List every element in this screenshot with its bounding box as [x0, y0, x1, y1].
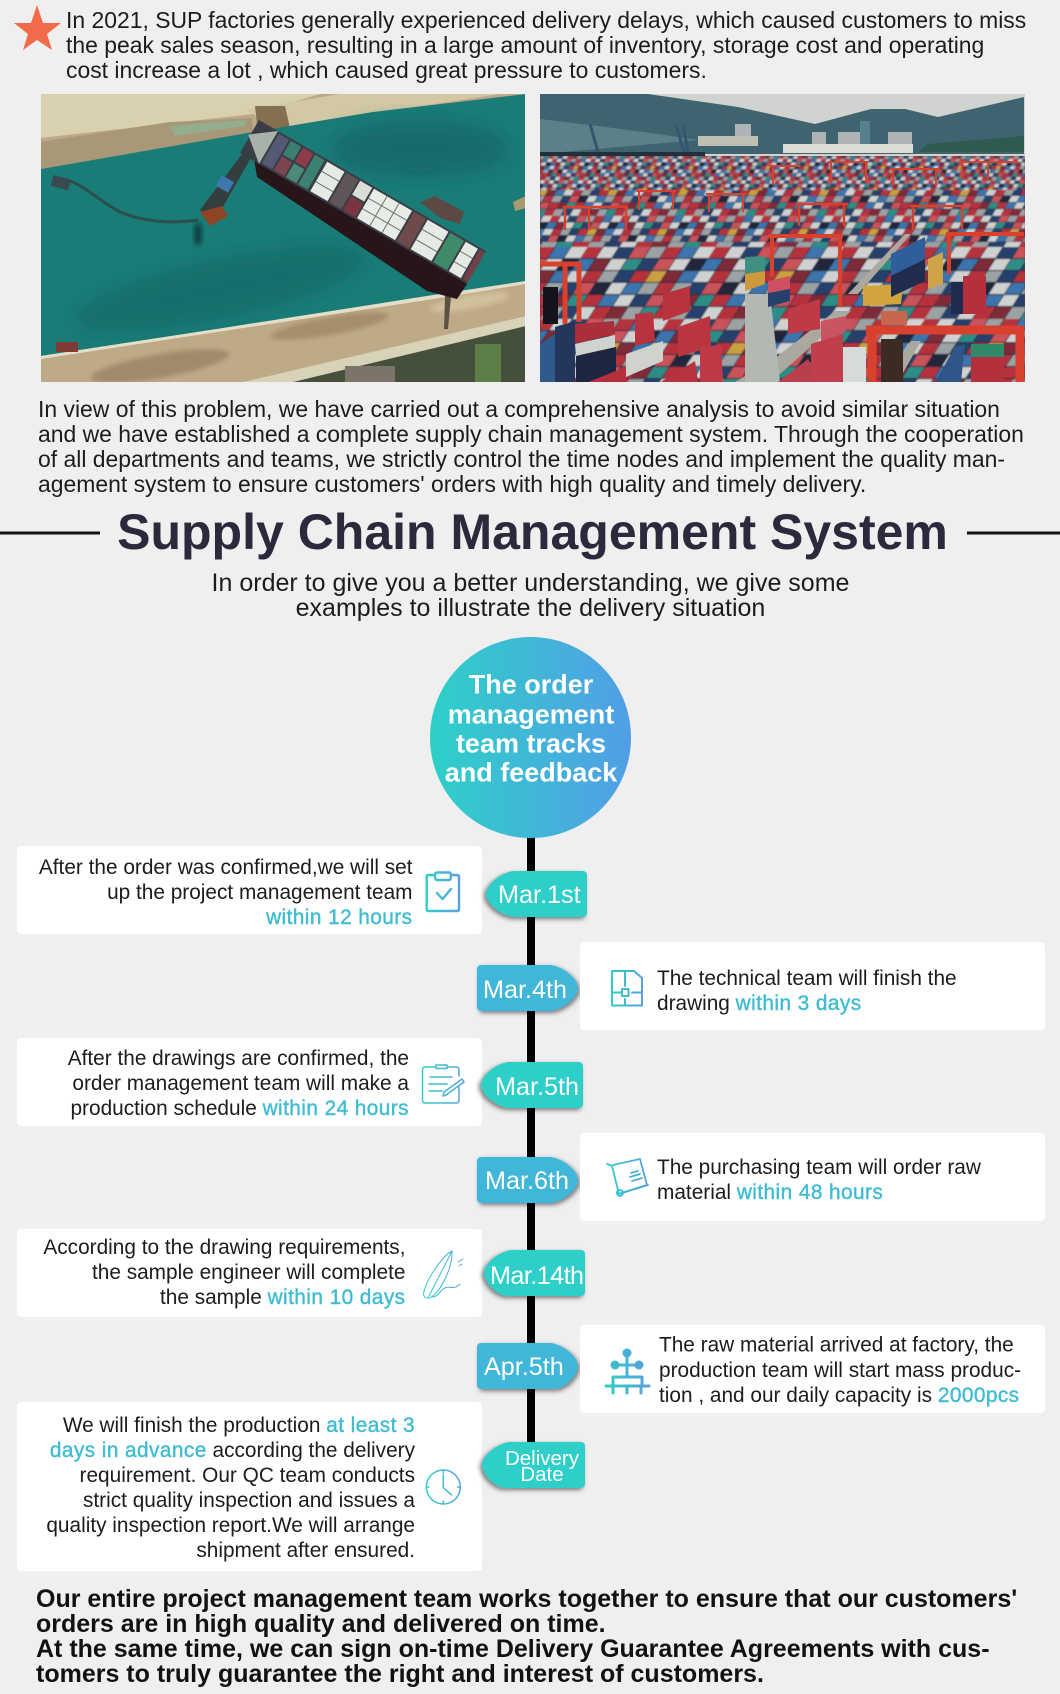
tag: Mar.6th [477, 1157, 578, 1203]
intro paragraph: cost increase a lot , which caused great pressure to customers. [66, 57, 707, 83]
subtitle [212, 569, 849, 622]
body paragraph [38, 396, 1024, 497]
dredger and floating pipe [51, 150, 526, 352]
foreground containers [540, 234, 1004, 382]
tag: delivery date [482, 1442, 585, 1488]
ship deck with containers [238, 119, 486, 284]
tag: delivery date: Date [520, 1463, 564, 1486]
tag: Mar.5th [481, 1062, 583, 1108]
icon: floor plan document [612, 971, 642, 1006]
card: final inspection and shipment: requirement. Our QC team conducts [80, 1464, 415, 1487]
icon: red star [14, 5, 61, 50]
card: purchasing raw material: The purchasing team will order raw [657, 1156, 982, 1179]
card: final inspection and shipment: quality inspection report.We will arrange [46, 1514, 415, 1537]
closing statement: At the same time, we can sign on-time Delivery Guarantee Agreements with cus- [36, 1635, 990, 1663]
closing statement [36, 1585, 1017, 1688]
closing statement: Our entire project management team works together to ensure that our customers' [36, 1585, 1017, 1613]
intro paragraph: the peak sales season, resulting in a large amount of inventory, storage cost and operating [66, 32, 984, 58]
icon: clock [426, 1470, 460, 1504]
tag: Mar.14th: Mar.14th [490, 1262, 584, 1290]
tag: Apr.5th: Apr.5th [484, 1353, 564, 1381]
body paragraph: of all departments and teams, we strictly control the time nodes and implement the quality man- [38, 446, 1005, 472]
circle: order management team heading: and feedback [445, 758, 618, 788]
card: technical team drawing: The technical team will finish the [657, 967, 957, 990]
tag: delivery date: Delivery [505, 1447, 580, 1470]
card: sample engineer: the sample engineer will complete [92, 1261, 406, 1284]
card: technical team drawing [580, 942, 1045, 1030]
card: mass production: tion , and our daily capacity is 2000pcs [659, 1384, 1020, 1407]
body paragraph: and we have established a complete supply chain management system. Through the cooperation [38, 421, 1024, 447]
card: project management team: within 12 hours [265, 906, 412, 929]
card: final inspection and shipment: days in advance according the delivery [50, 1439, 416, 1462]
tag: Apr.5th [477, 1343, 578, 1389]
card: final inspection and shipment: strict quality inspection and issues a [83, 1489, 415, 1512]
card: mass production: The raw material arrived at factory, the [659, 1334, 1014, 1356]
card: sample engineer [17, 1229, 482, 1317]
card: final inspection and shipment: shipment after ensured. [196, 1539, 415, 1562]
intro paragraph: In 2021, SUP factories generally experienced delivery delays, which caused customers to miss [66, 7, 1026, 33]
circle: order management team heading: team tracks [456, 728, 606, 758]
title with side rules: Supply Chain Management System [117, 504, 948, 560]
subtitle: examples to illustrate the delivery situation [296, 594, 765, 622]
subtitle: In order to give you a better understanding, we give some [212, 569, 849, 597]
body paragraph: In view of this problem, we have carried out a comprehensive analysis to avoid similar situation [38, 396, 1000, 422]
card: project management team: up the project management team [107, 881, 412, 904]
card: mass production: production team will start mass produc- [659, 1359, 1021, 1382]
card: production schedule: production schedule within 24 hours [70, 1097, 409, 1120]
card: project management team [17, 846, 482, 934]
card: production schedule [17, 1038, 482, 1126]
icon: production line [606, 1348, 649, 1393]
card: production schedule: order management team will make a [72, 1072, 409, 1095]
card: purchasing raw material [580, 1133, 1045, 1221]
closing statement: tomers to truly guarantee the right and interest of customers. [36, 1660, 764, 1688]
tag: Mar.1st [486, 871, 587, 917]
tag: Mar.14th [484, 1250, 585, 1296]
circle: order management team heading: The order [469, 670, 594, 700]
card: final inspection and shipment: We will finish the production at least 3 [63, 1414, 415, 1437]
circle: order management team heading [430, 637, 631, 838]
card: sample engineer: According to the drawing requirements, [43, 1236, 406, 1259]
card: purchasing raw material: material within 48 hours [657, 1181, 883, 1204]
timeline spine [527, 830, 535, 1445]
icon: surfboard sample [424, 1251, 463, 1298]
icon: clipboard check [427, 872, 459, 911]
card: mass production [580, 1325, 1045, 1413]
card: sample engineer: the sample within 10 days [160, 1286, 406, 1309]
ship hull shadow [254, 161, 467, 299]
tag: Mar.4th: Mar.4th [483, 976, 567, 1004]
tag: Mar.6th: Mar.6th [485, 1167, 569, 1195]
icon: cart with box [607, 1159, 648, 1196]
circle: order management team heading: management [448, 700, 614, 730]
photo: container port with red gantry cranes [538, 94, 1028, 384]
card: project management team: After the order was confirmed,we will set [39, 856, 413, 879]
tag: Mar.5th: Mar.5th [495, 1073, 579, 1101]
card: final inspection and shipment [17, 1402, 482, 1571]
red gantry cranes [540, 162, 1024, 384]
intro paragraph [66, 7, 1026, 83]
icon: checklist with pencil [422, 1065, 464, 1103]
closing statement: orders are in high quality and delivered on time. [36, 1610, 606, 1638]
card: technical team drawing: drawing within 3 days [657, 992, 862, 1015]
tag: Mar.1st: Mar.1st [498, 881, 581, 909]
body paragraph: agement system to ensure customers' orders with high quality and timely delivery. [38, 471, 866, 497]
card: production schedule: After the drawings are confirmed, the [68, 1047, 409, 1070]
photo: container ship stuck in canal [40, 94, 530, 390]
tag: Mar.4th [477, 965, 578, 1011]
